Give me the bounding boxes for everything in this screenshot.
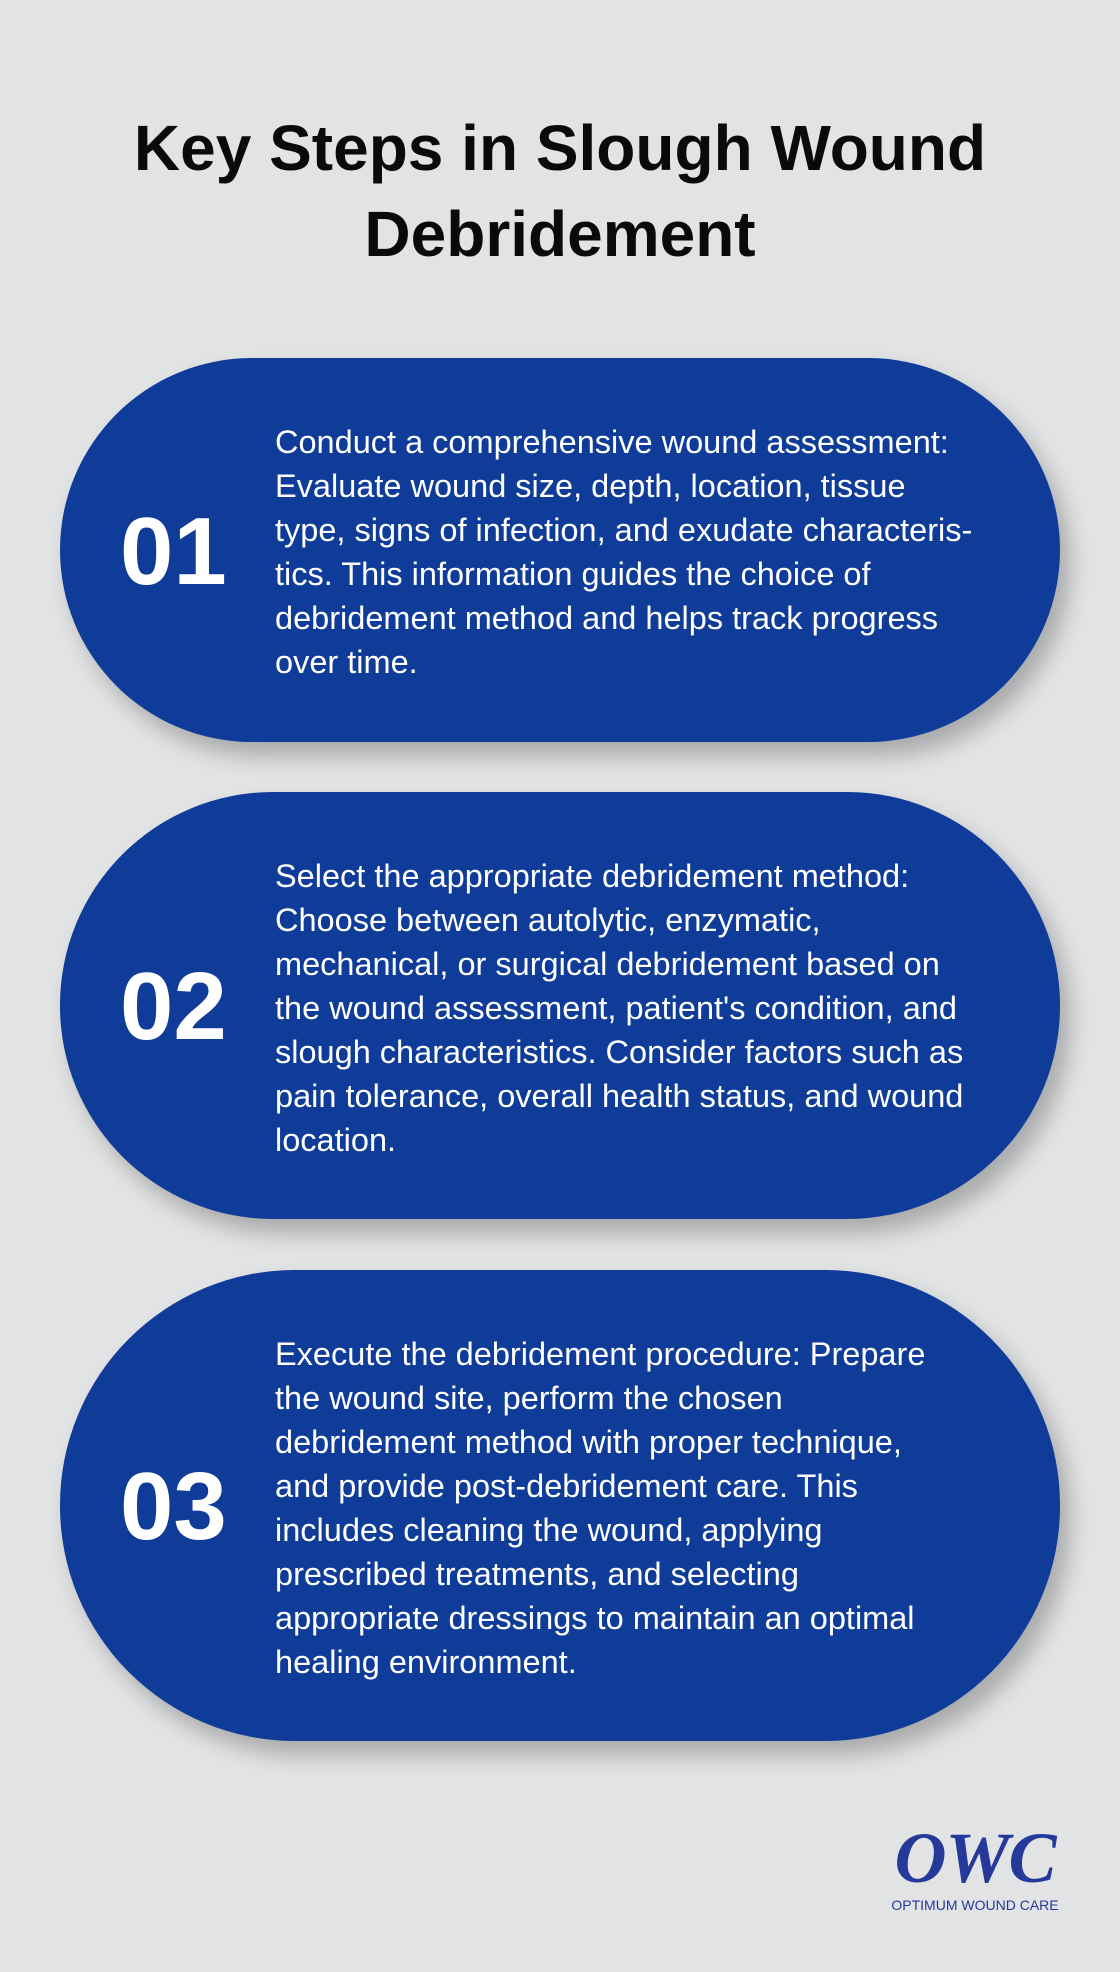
text step 3: Execute the debridement procedure: Prepare	[275, 1336, 925, 1372]
panel: step 3	[60, 1270, 1060, 1741]
text step 3	[275, 1336, 925, 1680]
text step 2: location.	[275, 1122, 396, 1158]
text step 2: slough characteristics. Consider factors such as	[275, 1034, 963, 1070]
text step 2: pain tolerance, overall health status, and wound	[275, 1078, 963, 1114]
text step 3: includes cleaning the wound, applying	[275, 1512, 822, 1548]
text step 2	[275, 858, 963, 1158]
text step 2: Choose between autolytic, enzymatic,	[275, 902, 821, 938]
text step 3: the wound site, perform the chosen	[275, 1380, 783, 1416]
number 03: 03	[120, 1453, 227, 1560]
text step 1: Conduct a comprehensive wound assessment:	[275, 424, 949, 460]
logo: OPTIMUM WOUND CARE	[891, 1897, 1059, 1913]
text step 3: appropriate dressings to maintain an optimal	[275, 1600, 915, 1636]
title: Debridement	[364, 198, 756, 270]
text step 2: the wound assessment, patient's condition, and	[275, 990, 957, 1026]
text step 1: tics. This information guides the choice of	[275, 556, 871, 592]
text step 2: mechanical, or surgical debridement based on	[275, 946, 940, 982]
number 02: 02	[120, 953, 227, 1060]
text step 1: debridement method and helps track progress	[275, 600, 938, 636]
text step 3: debridement method with proper technique,	[275, 1424, 902, 1460]
text step 1: type, signs of infection, and exudate characteris-	[275, 512, 972, 548]
text step 1: Evaluate wound size, depth, location, tissue	[275, 468, 906, 504]
panel: step 2	[60, 792, 1060, 1219]
logo: OWC	[894, 1818, 1056, 1898]
text step 3: and provide post-debridement care. This	[275, 1468, 858, 1504]
title: Key Steps in Slough Wound	[134, 112, 986, 184]
text step 2: Select the appropriate debridement method:	[275, 858, 909, 894]
number 01: 01	[120, 498, 227, 605]
title	[134, 112, 986, 270]
text step 1	[275, 424, 972, 680]
text step 1: over time.	[275, 644, 418, 680]
text step 3: healing environment.	[275, 1644, 577, 1680]
text step 3: prescribed treatments, and selecting	[275, 1556, 799, 1592]
panel: step 1	[60, 358, 1060, 742]
